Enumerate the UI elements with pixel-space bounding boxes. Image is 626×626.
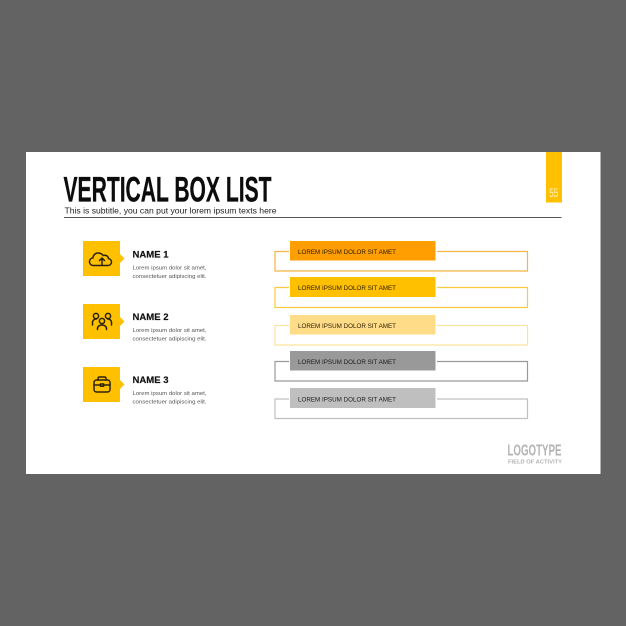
list box 5: LOREM IPSUM DOLOR SIT AMET xyxy=(298,396,396,404)
name 2 description xyxy=(132,328,207,342)
list box 1 xyxy=(275,241,528,271)
icon box 1 xyxy=(83,241,124,276)
list box 2: LOREM IPSUM DOLOR SIT AMET xyxy=(298,285,396,292)
list box 4: LOREM IPSUM DOLOR SIT AMET xyxy=(298,359,396,366)
logotype xyxy=(508,442,562,466)
icon box 2 xyxy=(83,304,124,339)
icon: people xyxy=(92,313,112,330)
logotype: FIELD OF ACTIVITY xyxy=(508,460,562,466)
icon: briefcase xyxy=(94,377,110,392)
name 3 heading: NAME 3 xyxy=(132,375,168,385)
name 2 description: Lorem ipsum dolor sit amet, xyxy=(132,328,207,334)
list box 3 xyxy=(275,315,528,345)
list box 2 xyxy=(275,277,528,308)
slide panel xyxy=(26,152,600,474)
item: Name 3 xyxy=(83,367,207,406)
subtitle: This is subtitle, you can put your lorem ipsum texts here xyxy=(64,206,277,216)
name 3 description: consectetuer adipiscing elit. xyxy=(132,400,207,406)
logotype: LOGOTYPE xyxy=(508,442,562,460)
item: Name 2 xyxy=(83,304,207,342)
list box 3: LOREM IPSUM DOLOR SIT AMET xyxy=(298,323,396,330)
list box 1: LOREM IPSUM DOLOR SIT AMET xyxy=(298,249,396,256)
header rule xyxy=(64,217,562,218)
page number tab: 55 xyxy=(549,186,559,200)
list box 4 xyxy=(275,351,528,381)
name 1 heading: NAME 1 xyxy=(132,250,168,260)
name 3 description xyxy=(132,391,207,406)
name 1 description: Lorem ipsum dolor sit amet, xyxy=(132,266,207,272)
list box 5 xyxy=(275,388,528,418)
name 1 description: consectetuer adipiscing elit. xyxy=(132,274,207,280)
name 2 description: consectetuer adipiscing elit. xyxy=(132,336,207,342)
title: VERTICAL BOX LIST xyxy=(64,170,272,210)
page number tab xyxy=(546,152,562,202)
item: Name 1 xyxy=(83,241,207,280)
icon: cloud upload xyxy=(89,253,112,266)
name 2 heading: NAME 2 xyxy=(132,312,168,322)
name 3 description: Lorem ipsum dolor sit amet, xyxy=(132,391,207,397)
icon box 3 xyxy=(83,367,124,402)
name 1 description xyxy=(132,266,207,280)
